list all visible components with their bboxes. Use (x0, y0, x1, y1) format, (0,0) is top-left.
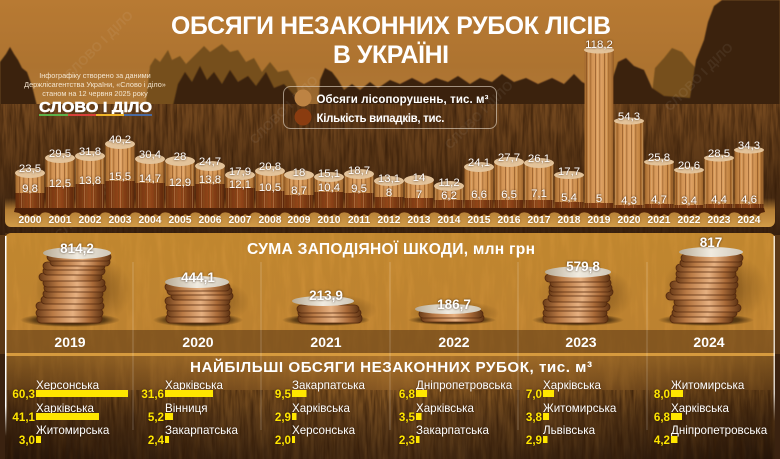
damage values (60, 235, 722, 312)
stump 2015: 6,6 (471, 189, 487, 201)
column 2021: 2,9 (275, 411, 292, 424)
stump 2020: 54,3 (618, 111, 640, 123)
title: ОБСЯГИ НЕЗАКОННИХ РУБОК ЛІСІВ (171, 13, 611, 40)
stump 2007: 17,9 (229, 166, 251, 178)
column 2022: 6,8 (399, 388, 416, 401)
stump 2018: 2018 (558, 215, 581, 226)
watermarks (52, 8, 736, 242)
column 2022: Харківська (416, 402, 474, 415)
stump 2014: 11,2 (438, 177, 460, 189)
stump 2000: 9,8 (22, 183, 38, 195)
column 2021 (275, 379, 365, 447)
stump 2023: 2023 (708, 215, 731, 226)
stump 2017: 2017 (528, 215, 551, 226)
stump 2014: 6,2 (441, 190, 457, 202)
stump 2024: 34,3 (738, 140, 760, 152)
coin stack 2019 (20, 247, 132, 328)
stump 2002 (74, 146, 106, 226)
column 2020: Закарпатська (165, 424, 238, 437)
stump 2005: 12,9 (169, 177, 191, 189)
stump 2013: 7 (416, 189, 422, 201)
watermarks: СЛОВО І ДІЛО (62, 8, 136, 82)
stump 2011: 9,5 (351, 183, 367, 195)
column 2021: Закарпатська (292, 379, 365, 392)
stump 2013: 2013 (408, 215, 431, 226)
stump 2000 (14, 163, 46, 226)
stump 2019 (583, 39, 615, 226)
stump 2012 (373, 173, 405, 226)
stump 2004 (134, 149, 166, 226)
stump 2020 (613, 111, 645, 226)
column 2019: Харківська (36, 402, 94, 415)
column 2023: Харківська (543, 379, 601, 392)
stump 2016: 27,7 (498, 152, 520, 164)
source credit (24, 71, 166, 98)
stump 2004: 30,4 (139, 149, 161, 161)
column 2024: 6,8 (654, 411, 671, 424)
stump 2008: 10,5 (259, 182, 281, 194)
stump 2016: 2016 (498, 215, 521, 226)
stump 2020: 4,3 (621, 195, 637, 207)
stump 2012: 13,1 (378, 173, 400, 185)
column 2019 (12, 379, 128, 447)
stump 2010 (313, 168, 345, 226)
column 2019: 41,1 (12, 411, 36, 424)
coin stack 2021 (282, 294, 377, 326)
stump 2001 (44, 148, 76, 226)
stump 2005 (164, 151, 196, 226)
stump 2006 (194, 156, 226, 226)
source credit: станом на 12 червня 2025 року (42, 89, 148, 98)
coin stack 2023 (532, 265, 633, 326)
damage years: 2022 (438, 334, 470, 350)
stump 2001: 2001 (49, 215, 72, 226)
damage years: 2023 (565, 334, 597, 350)
stump 2015: 24,1 (468, 157, 490, 169)
column 2024: Харківська (671, 402, 729, 415)
stump 2006: 2006 (199, 215, 222, 226)
column 2023: 7,0 (526, 388, 542, 401)
stump 2014: 2014 (438, 215, 461, 226)
stump 2018: 5,4 (561, 192, 577, 204)
stump 2013 (403, 172, 435, 226)
stump 2009: 18 (293, 167, 305, 179)
column 2019: 60,3 (12, 388, 36, 401)
stump 2007 (224, 166, 256, 226)
column 2024 (654, 379, 768, 447)
column 2023: Житомирська (543, 402, 617, 415)
stump 2021 (643, 152, 675, 226)
damage years: 2020 (182, 334, 214, 350)
column 2020 (141, 379, 238, 447)
stump 2024: 4,6 (741, 194, 757, 206)
stump 2003: 2003 (109, 215, 132, 226)
column 2019: Херсонська (36, 379, 100, 392)
stump 2009: 8,7 (291, 185, 307, 197)
stump 2019: 5 (596, 193, 602, 205)
column 2022: 3,5 (399, 411, 416, 424)
coin stack 2024 (658, 247, 767, 326)
stump 2009 (283, 167, 315, 226)
stump 2022 (673, 160, 705, 226)
watermarks: СЛОВО І ДІЛО (662, 40, 736, 114)
damage values: 579,8 (566, 259, 600, 274)
column 2019: Житомирська (36, 424, 110, 437)
column 2023: 3,8 (526, 411, 543, 424)
stump 2023: 4,4 (711, 194, 727, 206)
damage values: 444,1 (181, 270, 215, 285)
column 2023: Львівська (543, 424, 596, 437)
stump chart: volumes and cases by year (14, 39, 765, 226)
stump 2008: 2008 (259, 215, 282, 226)
column 2024: 4,2 (654, 434, 670, 447)
column 2020: Харківська (165, 379, 223, 392)
stump 2024 (733, 140, 765, 226)
stump 2006: 13,8 (199, 174, 221, 186)
watermarks: СЛОВО І ДІЛО (52, 168, 126, 242)
coin stack 2022 (408, 301, 500, 325)
stump 2019: 118,2 (585, 39, 613, 51)
watermarks: СЛОВО І ДІЛО (247, 73, 321, 147)
column 2021: Харківська (292, 402, 350, 415)
column 2019: 3,0 (19, 434, 35, 447)
stump 2014 (433, 177, 465, 226)
stump 2010: 15,1 (318, 168, 340, 180)
legend: Обсяги лісопорушень, тис. м³ (316, 94, 489, 106)
panel: damage amount (5, 233, 775, 356)
source credit: Інфографіку створено за даними (39, 71, 151, 80)
stump 2004: 14,7 (139, 173, 161, 185)
damage values: 814,2 (60, 241, 94, 256)
column 2024: Житомирська (671, 379, 745, 392)
stump 2003 (104, 134, 136, 226)
stump 2016 (493, 152, 525, 226)
stump 2005: 2005 (169, 215, 192, 226)
column 2020: 2,4 (148, 434, 165, 447)
stump 2003: 40,2 (109, 134, 131, 146)
stump 2016: 6,5 (501, 189, 517, 201)
column 2021: 2,0 (275, 434, 291, 447)
stump 2018: 17,7 (558, 166, 580, 178)
stump 2011: 2011 (348, 215, 370, 226)
stump 2021: 4,7 (651, 194, 667, 206)
stump 2009: 2009 (288, 215, 311, 226)
years strip (5, 198, 775, 227)
logo: Слово і діло: СЛОВО І ДІЛО (39, 100, 152, 116)
column 2021: Херсонська (292, 424, 356, 437)
stump 2001: 29,5 (49, 148, 71, 160)
stump 2018 (553, 166, 585, 226)
stump 2007: 12,1 (229, 179, 251, 191)
column 2020: 31,6 (141, 388, 165, 401)
stump 2012: 8 (386, 187, 392, 199)
stump 2002: 31,8 (79, 146, 101, 158)
stump 2011 (343, 165, 375, 226)
stump 2024: 2024 (738, 215, 761, 226)
damage values: 213,9 (309, 288, 343, 303)
stump 2000: 23,5 (19, 163, 41, 175)
stump 2022: 20,6 (678, 160, 700, 172)
stump 2013: 14 (413, 172, 425, 184)
coin stack 2020 (153, 276, 250, 327)
stump 2005: 28 (174, 151, 186, 163)
volumes heading: НАЙБІЛЬШІ ОБСЯГИ НЕЗАКОННИХ РУБОК, тис. м³ (190, 358, 592, 376)
panel: largest volumes (5, 356, 775, 459)
stump 2023 (703, 148, 735, 226)
stump 2015 (463, 157, 495, 226)
stump 2003: 15,5 (109, 171, 131, 183)
stump 2023: 28,5 (708, 148, 730, 160)
stump 2010: 10,4 (318, 182, 340, 194)
damage years: 2024 (693, 334, 725, 350)
stump 2007: 2007 (229, 215, 252, 226)
column 2020: Вінниця (165, 402, 208, 415)
stump 2020: 2020 (618, 215, 641, 226)
column 2023 (526, 379, 617, 447)
stump 2022: 2022 (678, 215, 701, 226)
column 2024: 8,0 (654, 388, 670, 401)
column 2022 (399, 379, 513, 447)
column 2022: Дніпропетровська (416, 379, 513, 392)
stump 2021: 25,8 (648, 152, 670, 164)
stump 2000: 2000 (19, 215, 42, 226)
stump 2006: 24,7 (199, 156, 221, 168)
title: В УКРАЇНІ (333, 42, 449, 69)
damage values: 817 (700, 235, 722, 250)
legend (284, 86, 496, 128)
stump 2017: 26,1 (528, 153, 550, 165)
title (171, 13, 611, 69)
watermarks: СЛОВО І ДІЛО (442, 78, 516, 152)
damage years: 2019 (54, 334, 86, 350)
column 2020: 5,2 (148, 411, 164, 424)
stump 2002: 13,8 (79, 175, 101, 187)
stump 2017: 7,1 (531, 188, 547, 200)
column 2021: 9,5 (275, 388, 292, 401)
damage heading: СУМА ЗАПОДІЯНОЇ ШКОДИ, млн грн (247, 240, 535, 258)
stump 2019: 2019 (588, 215, 611, 226)
stump 2011: 18,7 (348, 165, 370, 177)
stump 2010: 2010 (318, 215, 341, 226)
stump 2008 (254, 161, 286, 226)
stump 2022: 3,4 (681, 195, 697, 207)
stump 2008: 20,8 (259, 161, 281, 173)
stump 2017 (523, 153, 555, 226)
damage values: 186,7 (437, 297, 471, 312)
source credit: Держлісагентства України, «Слово і діло» (24, 80, 166, 89)
stump 2002: 2002 (79, 215, 102, 226)
stump 2004: 2004 (139, 215, 162, 226)
column 2024: Дніпропетровська (671, 424, 768, 437)
legend: Кількість випадків, тис. (316, 113, 444, 125)
column 2022: Закарпатська (416, 424, 489, 437)
stump 2012: 2012 (378, 215, 401, 226)
stump 2021: 2021 (648, 215, 671, 226)
stump 2001: 12,5 (49, 178, 71, 190)
column 2023: 2,9 (526, 434, 543, 447)
damage years (54, 334, 725, 350)
damage years: 2021 (310, 334, 342, 350)
column 2022: 2,3 (399, 434, 416, 447)
stump 2015: 2015 (468, 215, 491, 226)
